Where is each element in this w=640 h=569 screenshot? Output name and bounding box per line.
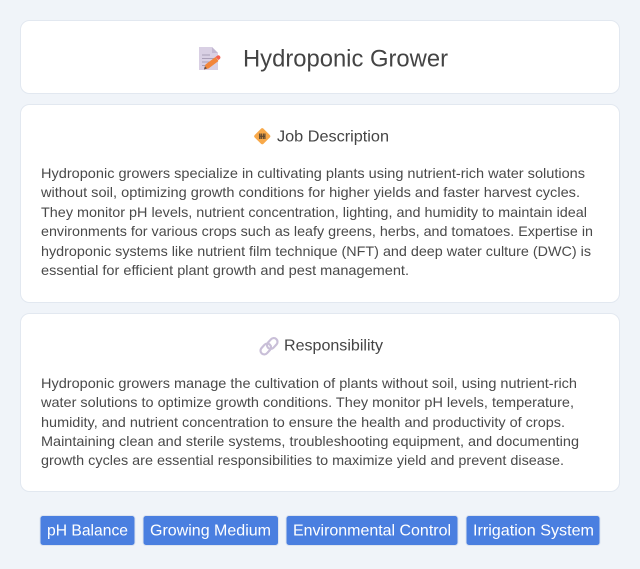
tag: Environmental Control: Environmental Control xyxy=(293,522,451,540)
icon: orange diamond xyxy=(253,127,271,145)
text block: responsibility: Maintaining clean and sterile systems, troubleshooting equipment, and documenting xyxy=(41,433,579,449)
text block: job description: hydroponic systems like nutrient film technique (NFT) and deep water culture (DWC) is xyxy=(41,243,591,259)
text block: responsibility: growth cycles are essential responsibilities to maximize yield and prevent disease. xyxy=(41,452,564,468)
tag: Irrigation System: Irrigation System xyxy=(473,522,594,540)
icon: chain link xyxy=(259,337,279,356)
tag: Irrigation System xyxy=(466,516,600,546)
text block: job description: They monitor pH levels, nutrient concentration, lighting, and humidity to maintain ideal xyxy=(41,204,587,220)
tag: pH Balance xyxy=(40,516,135,546)
tag: Growing Medium xyxy=(143,516,278,546)
text block: job description xyxy=(40,165,593,278)
title: Hydroponic Grower xyxy=(243,46,448,72)
tag: Environmental Control xyxy=(286,516,458,546)
heading: responsibility: Responsibility xyxy=(284,338,383,354)
heading: job description: Job Description xyxy=(277,128,389,146)
text block: job description: without soil, optimizing growth conditions for higher yields and faster harvest cycles. xyxy=(40,184,580,200)
text block: job description: environments for various crops such as leafy greens, herbs, and tomatoes. Expertise in xyxy=(41,223,593,239)
tag: Growing Medium: Growing Medium xyxy=(150,522,271,540)
icon: document with pencil xyxy=(199,47,220,70)
text block: job description: essential for efficient plant growth and pest management. xyxy=(41,262,409,278)
panel: title card xyxy=(20,20,620,94)
text block: responsibility: Hydroponic growers manage the cultivation of plants without soil, using nutrient-rich xyxy=(41,375,577,391)
text block: responsibility xyxy=(40,375,579,468)
text block: responsibility: water solutions to optimize growth conditions. They monitor pH levels, temperature, xyxy=(40,394,574,410)
text block: responsibility: humidity, and nutrient concentration to ensure the health and productivity of crops. xyxy=(41,414,565,430)
tags row xyxy=(40,516,600,546)
text block: job description: Hydroponic growers specialize in cultivating plants using nutrient-rich water solutions xyxy=(41,165,585,181)
tag: pH Balance: pH Balance xyxy=(47,522,128,540)
panel: responsibility xyxy=(20,314,620,492)
panel: job description xyxy=(20,104,620,302)
